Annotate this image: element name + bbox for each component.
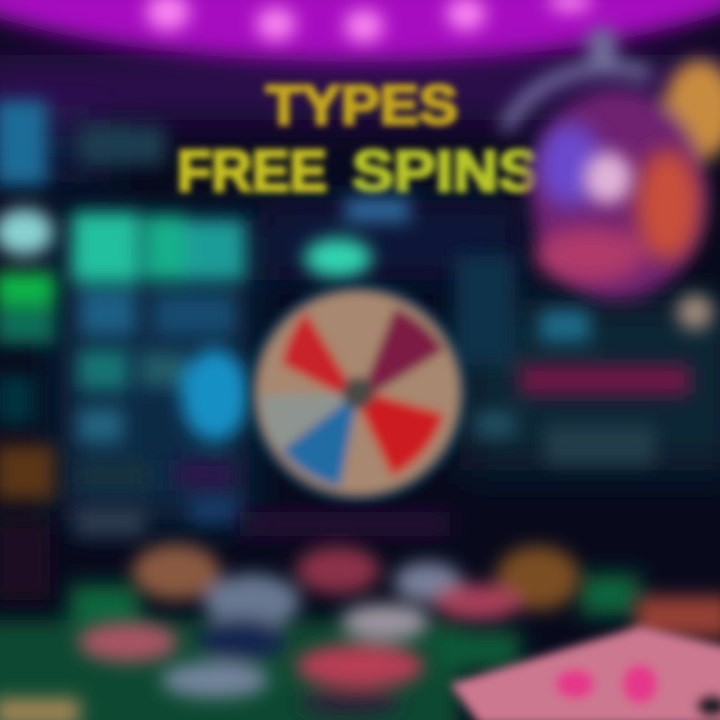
teal dome and blue accent xyxy=(304,198,410,278)
ceiling lights xyxy=(146,0,592,43)
background glow regions xyxy=(0,55,720,520)
slot reels xyxy=(72,212,249,536)
prize wheel, upper right xyxy=(505,27,720,300)
title text: SPINS xyxy=(352,139,540,204)
title text: FREE xyxy=(177,139,327,204)
left machines xyxy=(0,100,165,600)
centre prize wheel xyxy=(248,283,468,503)
title text: TYPES xyxy=(266,73,458,136)
purple ceiling xyxy=(0,0,720,62)
title text xyxy=(177,73,540,204)
lower right panels xyxy=(455,255,713,465)
green casino table xyxy=(0,575,640,720)
poker chips xyxy=(0,544,720,720)
dark base below wheel xyxy=(240,512,450,536)
pink card, lower right xyxy=(450,626,720,720)
